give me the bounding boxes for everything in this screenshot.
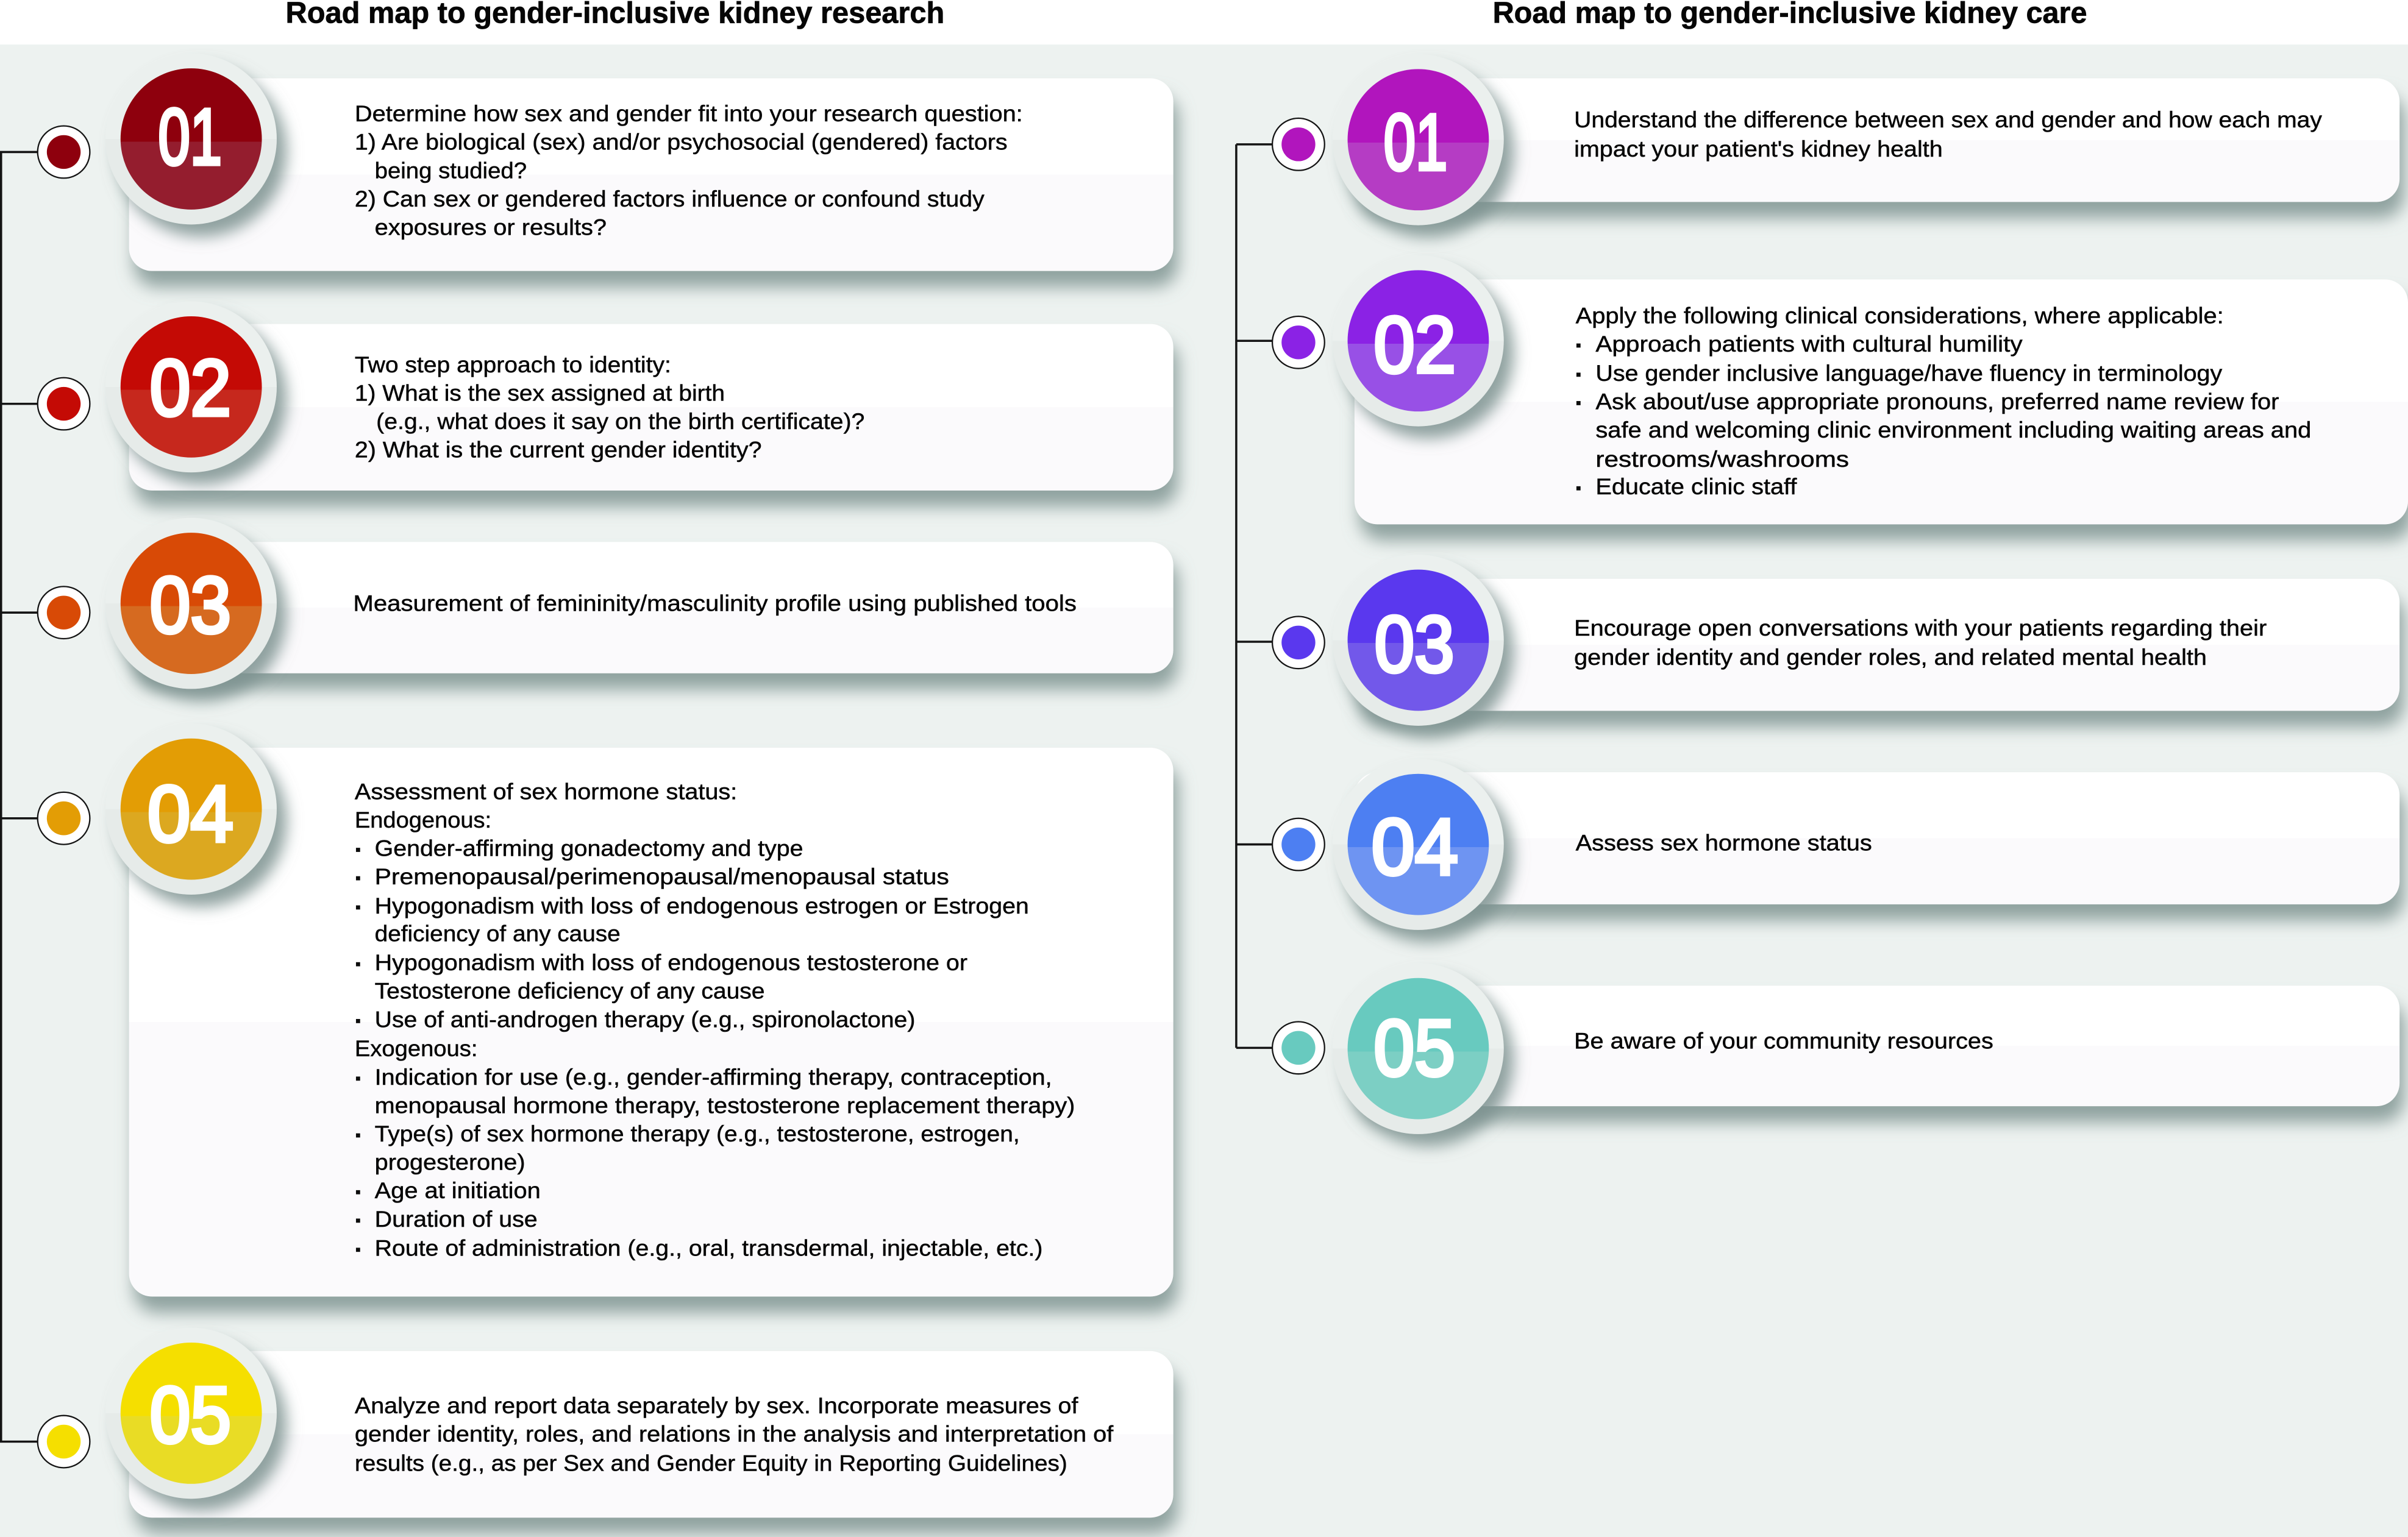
text block 03 [1574, 615, 2267, 670]
text block 01: impact your patient's kidney health [1574, 136, 1943, 162]
text block 04: progesterone) [375, 1149, 525, 1175]
badge 05: 05 [1373, 1003, 1455, 1093]
text block 05: Be aware of your community resources [1574, 1028, 1993, 1054]
badge 04 [105, 723, 277, 895]
badge 04: 04 [1372, 802, 1458, 892]
text block 02: Use gender inclusive language/have fluency in terminology [1595, 360, 2223, 386]
badge 04 [1333, 759, 1504, 930]
card 01 [1355, 79, 2399, 202]
badge 03: 03 [150, 560, 231, 650]
marker 02 [38, 378, 90, 430]
text block 02 [1576, 302, 2311, 499]
text block 01: being studied? [375, 157, 527, 183]
text block 04 [355, 778, 1075, 1261]
badge 05: 05 [150, 1370, 231, 1460]
text block 04: Gender-affirming gonadectomy and type [375, 835, 803, 861]
text block 04: Hypogonadism with loss of endogenous estrogen or Estrogen [375, 893, 1029, 918]
badge 01 [1333, 54, 1504, 225]
text block 01: 1) Are biological (sex) and/or psychosocial (gendered) factors [355, 129, 1008, 155]
marker 04 [38, 792, 90, 845]
text block 02: Apply the following clinical considerations, where applicable: [1576, 302, 2224, 328]
text block 02: 2) What is the current gender identity? [355, 437, 761, 463]
text block 05: Analyze and report data separately by sex. Incorporate measures of [355, 1393, 1078, 1418]
marker 01 [1272, 118, 1325, 171]
marker 05 [1272, 1022, 1325, 1074]
text block 02: restrooms/washrooms [1595, 446, 1849, 472]
card 04 [129, 748, 1174, 1296]
text block 02: 1) What is the sex assigned at birth [355, 380, 725, 406]
text block 01 [1574, 107, 2322, 162]
badge 05 [1333, 963, 1504, 1134]
card 03 [129, 542, 1174, 673]
text block 03: Encourage open conversations with your patients regarding their [1574, 615, 2267, 641]
text block 02: safe and welcoming clinic environment including waiting areas and [1595, 417, 2311, 442]
text block 03: Measurement of femininity/masculinity profile using published tools [353, 591, 1077, 616]
card 02 [129, 324, 1174, 491]
text block 03: gender identity and gender roles, and related mental health [1574, 644, 2207, 670]
text block 04: Testosterone deficiency of any cause [375, 978, 765, 1004]
panel: care step 04 [1272, 759, 2399, 930]
badge 01: 01 [158, 92, 222, 182]
text block 04: Premenopausal/perimenopausal/menopausal status [375, 864, 949, 889]
timeline: research connector [0, 152, 38, 1442]
badge 05 [105, 1328, 277, 1499]
panel: care step 02 [1272, 255, 2408, 524]
badge 02: 02 [150, 343, 231, 432]
text block 04: Duration of use [375, 1206, 538, 1232]
panel: research step 03 [38, 518, 1174, 689]
text block 04: Assess sex hormone status [1576, 830, 1872, 856]
text block 01: exposures or results? [375, 214, 607, 240]
text block 02: Two step approach to identity: [355, 352, 671, 377]
text block 01: 2) Can sex or gendered factors influence or confound study [355, 186, 985, 211]
badge 02: 02 [1373, 300, 1456, 389]
text block 04: Exogenous: [355, 1035, 477, 1061]
text block 05 [355, 1393, 1114, 1475]
marker 01 [38, 126, 90, 178]
text block 02: Approach patients with cultural humility [1595, 331, 2023, 357]
badge 04: 04 [148, 769, 233, 859]
text block 04: Endogenous: [355, 807, 491, 832]
card 02 [1355, 280, 2408, 524]
panel: care step 03 [1272, 555, 2399, 726]
text block 04: deficiency of any cause [375, 920, 621, 946]
badge 02 [105, 302, 277, 472]
text block 04: Assessment of sex hormone status: [355, 778, 737, 804]
text block 01: Determine how sex and gender fit into your research question: [355, 101, 1023, 126]
text block 02: (e.g., what does it say on the birth certificate)? [376, 408, 864, 434]
marker 03 [1272, 616, 1325, 669]
text block 04: Age at initiation [375, 1177, 541, 1203]
card 03 [1355, 579, 2399, 711]
badge 01: 01 [1384, 97, 1447, 186]
marker 02 [1272, 316, 1325, 369]
panel: research step 04 [38, 723, 1174, 1296]
text block 02 [355, 352, 864, 463]
marker 05 [38, 1416, 90, 1468]
badge 03 [105, 518, 277, 689]
text block 05: results (e.g., as per Sex and Gender Equity in Reporting Guidelines) [355, 1450, 1067, 1475]
card 04 [1355, 772, 2399, 904]
badge 03 [1333, 555, 1504, 726]
badge 02 [1333, 255, 1504, 427]
text block 01 [355, 101, 1023, 240]
marker 04 [1272, 818, 1325, 870]
panel: research step 05 [38, 1328, 1174, 1517]
text block 04: Route of administration (e.g., oral, transdermal, injectable, etc.) [375, 1235, 1042, 1261]
text block 04: Use of anti-androgen therapy (e.g., spironolactone) [375, 1006, 915, 1032]
text block 02: Ask about/use appropriate pronouns, preferred name review for [1595, 388, 2279, 414]
text block 04: Indication for use (e.g., gender-affirming therapy, contraception, [375, 1064, 1052, 1090]
panel: research step 02 [38, 302, 1174, 491]
card 05 [129, 1351, 1174, 1517]
text block 04: Type(s) of sex hormone therapy (e.g., testosterone, estrogen, [375, 1121, 1020, 1146]
text block 01: Understand the difference between sex and gender and how each may [1574, 107, 2322, 132]
badge 01 [105, 54, 277, 224]
card 05 [1355, 985, 2399, 1106]
badge 03: 03 [1375, 599, 1455, 689]
text block 04: Hypogonadism with loss of endogenous testosterone or [375, 950, 967, 975]
card 01 [129, 79, 1174, 271]
text block 04: menopausal hormone therapy, testosterone replacement therapy) [375, 1092, 1075, 1118]
panel: care step 05 [1272, 963, 2399, 1134]
panel: care step 01 [1272, 54, 2399, 225]
panel: research step 01 [38, 54, 1174, 271]
timeline: care connector [1236, 144, 1273, 1048]
text block 05: gender identity, roles, and relations in the analysis and interpretation of [355, 1421, 1114, 1447]
marker 03 [38, 586, 90, 639]
text block 02: Educate clinic staff [1595, 474, 1797, 499]
